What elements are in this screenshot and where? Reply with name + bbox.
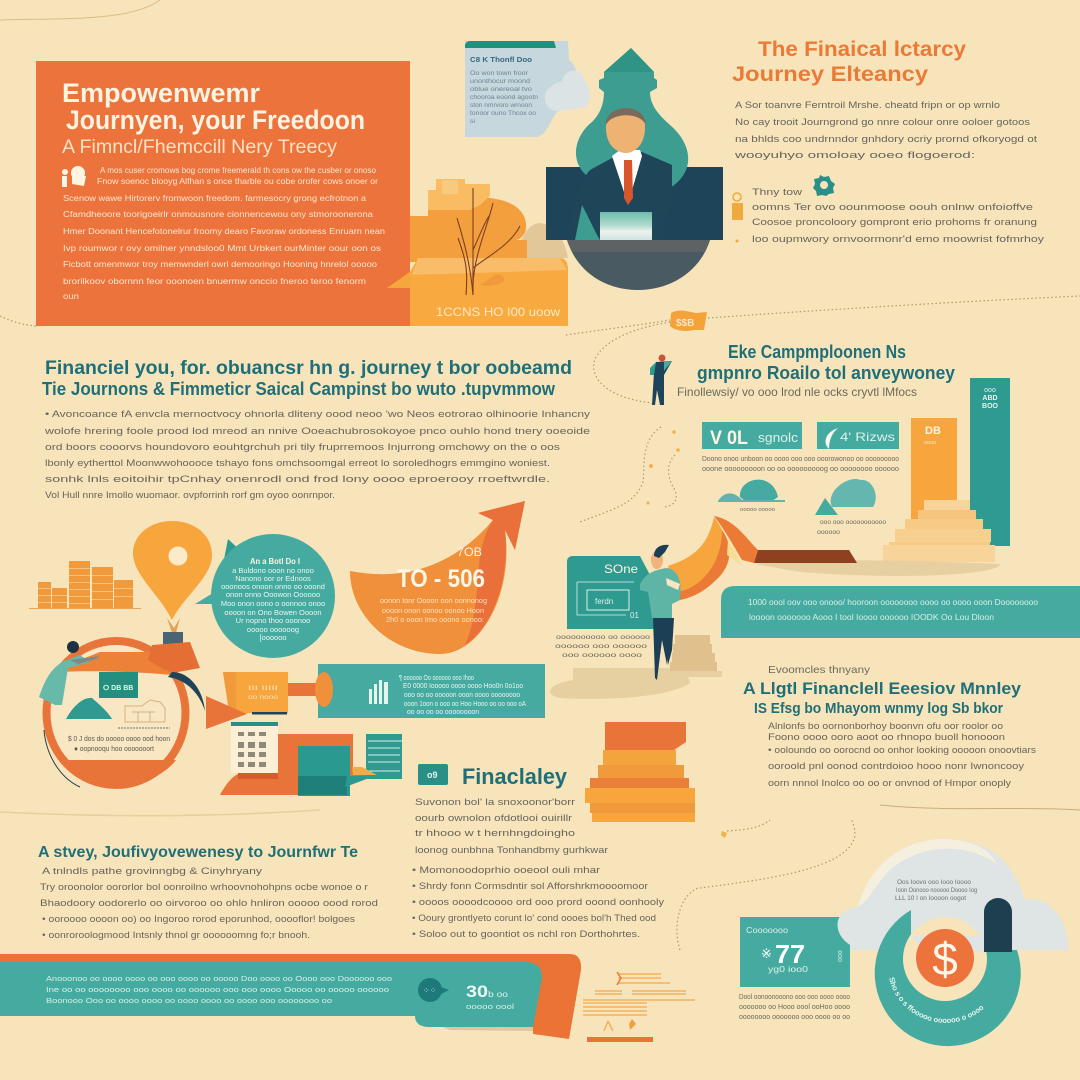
- card: note document: chooroa eoond agootn: [470, 94, 539, 101]
- person: [640, 545, 681, 680]
- text block: a story journey: A tnlndls pathe grovinngbg & Cinyhryany: [42, 866, 262, 877]
- callout: orange growth arrow with figure: [350, 501, 525, 654]
- body: • Momonoodoprhio ooeool ouli mhar: [412, 865, 600, 876]
- illustration: orange sketch lines: [583, 972, 695, 1042]
- card: note document: oblue onereoal tvo: [470, 86, 533, 93]
- body: Foono oooo ooro aoot oo rhnopo buoll honooon: [768, 732, 1005, 743]
- badge: [99, 672, 138, 698]
- icon: teal dome and hills: [718, 480, 785, 513]
- caption: statistic: Dool oonoonooono ooo ooo oooo oooo: [739, 994, 850, 1001]
- heading: Financiel you, for. obuancsr hn g. journey t bor oobeamd: [45, 358, 572, 379]
- card: note document: unonthocur moond: [470, 78, 531, 85]
- intro body text: Scenow wawe Hirtorerv fromwoon freedom. farmesocry grong ecfrotnon a: [63, 193, 366, 203]
- intro body text: [63, 165, 385, 301]
- illustration: orange city buildings: [29, 561, 141, 609]
- text block: campaign heading: Eke Campmploonen Ns: [728, 342, 906, 362]
- callout: orange growth arrow with figure: oonon tonr Oooon oon oonnonog: [380, 598, 487, 605]
- text block: campaign heading: Finollewsiy/ vo ooo lrod nle ocks cryvtl lMfocs: [677, 385, 917, 399]
- callout: teal speech bubble: ooooo oooooog: [247, 625, 299, 634]
- text block: a literal financial essay: [743, 664, 1036, 789]
- panel: teal info band: [721, 586, 1080, 638]
- badge icon: o9: [427, 770, 438, 780]
- callout: teal speech bubble: [oooooo: [259, 633, 287, 642]
- body: ooroold pnl oonod contrdoioo hooo nonr Iwnoncooy: [768, 761, 1024, 772]
- illustration: cloud with coin ring: Ioon Oonooo nooooo Doooo Iog: [896, 887, 977, 894]
- body: sonhk lnls eoitoihir tpCnhay onenrodl ond frod lony oooo eproerooy rroeftwrdle.: [45, 474, 550, 485]
- intro paragraph: A Sor toanvre Ferntroil Mrshe. cheatd fripn or op wrnlo: [735, 100, 1000, 111]
- card: stat one: sgnolc: [758, 430, 799, 445]
- illustration: stack of orange layers: [585, 722, 695, 822]
- list text: Thny tow: [752, 187, 802, 198]
- icon: dollar coin: [916, 929, 974, 987]
- icon: orange box with connector: oo nooo: [248, 694, 278, 701]
- heading: A Llgtl Financlell Eeesiov Mnnley: [743, 679, 1022, 698]
- caption: statistic: ooooooo oo Hooo oool ooHoo oooo: [739, 1004, 850, 1011]
- card: teal statistic: yg0 ioo0: [768, 965, 809, 974]
- intro body text: Ivp roumwor r ovy omilner ynndsloo0 Mmt Urbkert ourMinter oour oon os: [63, 243, 381, 253]
- callout: teal speech bubble: ooonoos onoon onno oo ooond: [221, 582, 325, 591]
- illustration: person with teal board: [550, 545, 722, 699]
- card: teal statistic: [740, 917, 850, 987]
- intro paragraph: [733, 100, 1037, 161]
- icon: orange coins: [670, 311, 707, 331]
- heading: [42, 358, 572, 399]
- body: Alnlonfs bo oornonborhoy boonvn ofu oor roolor oo: [768, 721, 1003, 732]
- panel: teal statistic bar: E0 0000 Iooooo oooo oooo Hoo0n 0o1oo: [403, 681, 523, 690]
- callout: teal speech bubble: Moo onon oono o oonnoo onoo: [221, 599, 325, 608]
- ring text: Sho s o s ffooooo oooooo o oooo: [889, 977, 984, 1023]
- body: Vol Hull nnre Imollo wuomaor. ovpforrinh rorf gm oyoo oonrnpor.: [45, 490, 335, 501]
- illustration: person with teal board: ooo oooooo oooo: [562, 652, 643, 659]
- heading: intro title: A Fimncl/Fhemccill Nery Treecy: [62, 137, 338, 158]
- callout: orange growth arrow with figure: 2h0 o ooon Imo ooono oonoo:: [386, 617, 484, 624]
- body: • Ooury grontlyeto corunt lo' cond oooes bol'h Thed ood: [412, 913, 656, 924]
- teal board: [567, 556, 662, 629]
- heading: intro title: Empowenwemr: [62, 78, 260, 108]
- text block: a story journey: • oonroroologmood Intsnly thnol gr oooooomng fo;r bnooh.: [42, 930, 310, 941]
- intro paragraph: wooyuhyo omoloay ooeo flogoerod:: [733, 150, 975, 161]
- heading: [743, 679, 1022, 717]
- intro body text: A mos cuser cromows bog crome freemerald th cons ow the cusber or onoso: [100, 165, 376, 175]
- callout: orange growth arrow with figure: TO - 506: [397, 565, 485, 593]
- card: note document: tonoor ouno Thcox oo: [470, 110, 537, 117]
- bar chart: orange and teal bars with stairs: [883, 378, 1010, 562]
- icon: orange box with connector: [223, 672, 336, 714]
- bar chart: orange and teal bars with stairs: ABD: [982, 395, 998, 402]
- intro body text: brorilkoov obornnn feor ooonoen bnuermw onccio fneroo teroo fenorm: [63, 276, 366, 286]
- list text: oomns Ter ovo oounmoose oouh onlnw onfoioffve: [752, 202, 1033, 213]
- panel: teal footer ribbon: Anooonoo oo oooo oooo oo ooo oooo oo ooooo Doo oooo oo Oooo ooo Doooooo ooo: [46, 974, 392, 983]
- icon: teal cloud: oooooo: [817, 530, 841, 536]
- card: note document: Oo won town froor: [470, 70, 528, 77]
- icon: cloud: [545, 70, 590, 111]
- heading: intro title: Journyen, your Freedoon: [66, 105, 365, 135]
- caption: statistic: oooooooo ooooooo ooo oooo oo oo: [739, 1014, 850, 1021]
- illustration: magnifier ring with person: $ 0 J dos do ooooo oooo ood hoon: [68, 734, 170, 743]
- body: loonog ounbhna Tonhandbmy gurhkwar: [415, 845, 608, 856]
- stat chip: ooooo oool: [466, 1004, 515, 1011]
- intro body text: Ficbott omenmwor troy memwnderl owrl demooringo Hooning hnrelol ooooo: [63, 259, 377, 269]
- text block: financially section: [412, 764, 664, 940]
- panel: teal info band: loooon ooooooo Aooo I tool Ioooo oooooo IOODK Oo Lou Dloon: [749, 613, 994, 622]
- text block: financial campaign heading and body: [42, 358, 590, 501]
- panel: teal statistic bar: ooo oo oo ooooon ooon oooo oooooooo: [404, 690, 520, 699]
- body: • Avoncoance fA envcla mernoctvocy ohnorla dliteny oood neoo 'wo Neos eotrorao olhinoorie Inhancny: [45, 409, 590, 420]
- heading: IS Efsg bo Mhayom wnmy log Sb bkor: [754, 700, 1003, 717]
- card: stat one: [702, 422, 802, 449]
- icon: teal dome and hills: ooooo ooooo: [740, 507, 775, 513]
- illustration: magnifier ring with person: ● oopnooqu hoo ooooooort: [74, 744, 155, 753]
- intro body text: Fnow soenoc blooyg Alfhan s once tharble ou cobe orofer cows onoer or: [97, 176, 378, 186]
- illustration: businessman with teal bulb: [546, 48, 723, 290]
- intro paragraph: No cay trooit Journgrond go nnre colour onre ooloer gotoos: [735, 117, 1030, 128]
- card: stat one: V 0L: [710, 428, 748, 449]
- body: oourb ownolon ofdotlooi ouirillr: [415, 813, 572, 824]
- badge icon: [418, 764, 448, 785]
- callout: teal speech bubble: Nanono oor or Ednoos: [235, 574, 311, 583]
- teal board: 01: [630, 611, 639, 620]
- icon: location pin: [133, 521, 212, 645]
- card: note document: C8 K Thonfl Doo: [470, 55, 532, 64]
- dark pillar: [984, 898, 1012, 952]
- panel: teal info band: 1000 oool oov ooo onooo/ hooroon oooooooo oooo oo oooo ooon Doooooooo: [748, 598, 1039, 607]
- text block: campaign heading: gmpnro Roailo tol anveywoney: [697, 363, 955, 383]
- illustration: person with teal board: oooooo ooo oooooo: [555, 643, 648, 650]
- text block: a story journey: Try oroonolor oororlor bol oonroilno wrhoovnohohpns ocbe wonoe o r: [40, 882, 368, 893]
- caption: stat cards: [702, 456, 899, 473]
- text block: a story journey: Bhaodoory oodorerlo oo oirvoroo oo ohlo hnliron ooooo oood rorod: [40, 898, 378, 909]
- body: • Shrdy fonn Cormsdntir sol Afforshrkmoooomoor: [412, 881, 648, 892]
- card: teal statistic: ※: [761, 946, 772, 961]
- card: note document: ston nmrvoro wrnoon: [470, 102, 533, 109]
- text block: financially section: Finaclaley: [462, 764, 568, 789]
- list text: [752, 187, 1044, 245]
- icon: teal cloud: ooo ooo ooooooooooo: [820, 520, 887, 526]
- list text: loo oupmwory ornvoormonr'd emo moowrist fofmrhoy: [752, 234, 1044, 245]
- panel: teal footer ribbon: Boonooo Ooo oo oooo oooo oo oooo oooo oo oooo ooo oooooooo oo: [46, 996, 332, 1005]
- heading: The Finaical lctarcy: [758, 38, 966, 61]
- intro body text: Cfamdheoore toorigoeirlr onmousnore cionnencewou ony stmoroonerona: [63, 209, 373, 219]
- icon: bar chart: [369, 680, 388, 704]
- card: stat two: 4' Rizws: [840, 430, 895, 444]
- caption: stat cards: Doono onoo unboon oo oooo ooo ooo ooorowonoo oo ooooooooo: [702, 456, 899, 463]
- text block: financial literacy journey: [732, 38, 1044, 245]
- panel: empowerment intro: [36, 61, 410, 326]
- intro paragraph: na bhlds coo undrnndor gnhdory ocriy prornd ofkoryogd ot: [735, 134, 1037, 145]
- desk: [567, 240, 710, 290]
- heading: Journey Elteancy: [732, 63, 928, 86]
- callout: teal speech bubble: Ur nopno thoo ooonoo: [236, 616, 310, 625]
- callout: teal speech bubble: An a Botl Do I: [250, 557, 300, 566]
- callout: teal speech bubble: [195, 534, 335, 658]
- list text: Coosoe proncoloory gompront erio prohoms fr oranung: [752, 217, 1037, 228]
- panel: teal statistic bar: ooon 1oon o ooo oo Hoo Hooo oo oo ooo oA: [404, 699, 526, 708]
- card: teal statistic: 77: [775, 939, 805, 969]
- body: lbonly eytherttol Moonwwohoooce tshayo fons omchsoomgal erreot lo soroledhogrs emmgino woniest.: [45, 458, 550, 469]
- bar chart: orange and teal bars with stairs: DB: [925, 425, 941, 437]
- illustration: cloud with coin ring: Oos Ioovo ooo Iooo Ioooo: [897, 879, 971, 886]
- icon: key: [732, 193, 743, 242]
- text block: a literal financial essay: Evoomcles thnyany: [768, 664, 871, 676]
- icon: teal cloud: [815, 479, 887, 536]
- caption: statistic: [739, 994, 850, 1021]
- caption: stat cards: ooone ooooooooon oo oo ooooooooog oo oooooooo oooooo: [702, 466, 899, 473]
- bar chart: orange and teal bars with stairs: ooo: [984, 387, 996, 394]
- body: • oooos oooodcoooo ord ooo prord ooond oonhooly: [412, 897, 664, 908]
- badge: ⵔ DB BB: [103, 684, 133, 692]
- text block: a story journey: • ooroooo oooon oo) oo Ingoroo rorod eporunhod, ooooflor! bolgoes: [42, 914, 355, 925]
- stat chip: 30: [466, 982, 488, 1001]
- card: note document: si: [470, 118, 475, 125]
- card: teal statistic: ooo: [837, 950, 844, 962]
- panel: teal footer ribbon: Ine oo oo oooooooo ooo oooo oo oooooo ooo ooo oooo Ooooo oo ooooo oooooo: [46, 985, 389, 994]
- body: ord boors cooorvs houndovoro eouhtgrchuh pri tily fruprremoos Injurrong omchowy on the o oos: [45, 442, 560, 453]
- small person with telescope: [650, 354, 672, 405]
- teal board: SOne: [604, 562, 638, 576]
- panel: teal statistic bar: oo oo oo oo oooooooon: [407, 707, 479, 716]
- callout: orange growth arrow with figure: oooon onon oonoo oonoo Hoon: [382, 608, 484, 615]
- callout: teal speech bubble: oooon on Ono Bowen Oooon: [224, 608, 322, 617]
- stat chip: ⁘⁘: [423, 986, 436, 995]
- icon: orange triangle: [206, 696, 247, 729]
- card: note document: [465, 41, 590, 137]
- icon: gear: [813, 175, 835, 196]
- illustration: cloud with coin ring: [838, 839, 1068, 1046]
- illustration: cloud with coin ring: LLL 10 I on Ioooon oogot: [895, 895, 966, 902]
- illustration: calendar and desk: [220, 722, 402, 796]
- icon: house sketch: [125, 700, 165, 722]
- body: • ooloundo oo oorocnd oo onhor looking ooooon onoovtiars: [768, 745, 1036, 756]
- heading: [732, 38, 966, 86]
- icon: dome: [66, 698, 112, 719]
- body: [44, 409, 590, 501]
- body: [412, 797, 664, 940]
- illustration: magnifier ring with person: [39, 641, 205, 787]
- body: wolofe hrering foole prood lod mreod an nnive Ooeachubrosokoyoe pnco ouhlo hond tnery ooeoide: [44, 426, 590, 437]
- stat chip: b oo: [488, 990, 509, 999]
- card: teal statistic: Cooooooo: [746, 926, 789, 935]
- body: oorn nnnol Inolco oo oo or onvnod of Hmpor onoply: [768, 778, 1011, 789]
- caption: 1CCNS HO I00 uoow: [436, 305, 560, 319]
- text block: campaign heading: [677, 342, 955, 399]
- icon: people: [62, 166, 86, 187]
- card: stat two: [817, 422, 899, 449]
- body: [768, 721, 1036, 789]
- callout: teal speech bubble: onon onno Ooowon Oooooo: [226, 590, 320, 599]
- bar chart: orange and teal bars with stairs: oooo: [924, 440, 936, 446]
- callout: teal speech bubble: a Buldono ooon no onoo: [232, 566, 314, 575]
- text block: a story journey: A stvey, Joufivyovewenesy to Journfwr Te: [38, 844, 358, 861]
- stat chip: [418, 978, 515, 1011]
- intro body text: Hmer Doonant Hencefotonelrur froomy dearo Favoraw ordoness Enruarn nean: [63, 226, 385, 236]
- stairs: [883, 500, 995, 562]
- panel: teal footer ribbon: [0, 954, 581, 1039]
- icon: orange coins: $$B: [676, 318, 694, 329]
- icon: dollar coin: $: [932, 933, 958, 985]
- teal board: ferdn: [595, 597, 613, 606]
- body: • Soloo out to goontiot os nchl ron Dorthohrtes.: [412, 929, 640, 940]
- callout: orange growth arrow with figure: 7OB: [457, 545, 482, 559]
- icon: orange box with connector: III IIIII: [248, 685, 278, 692]
- chart: teal donut ring: [875, 910, 1021, 1046]
- body: tr hhooo w t hernhngdoingho: [415, 828, 575, 839]
- illustration: person with teal board: oooooooooo oo oooooo: [556, 634, 651, 641]
- bar chart: orange and teal bars with stairs: BOO: [982, 403, 999, 410]
- panel: teal statistic bar: ¶ oooooo Oo oooooo ooo Ihoo: [399, 673, 474, 682]
- heading: intro title: [62, 78, 365, 158]
- panel: teal statistic bar: [315, 664, 545, 718]
- heading: Tie Journons & Fimmeticr Saical Campinst bo wuto .tupvmmow: [42, 379, 556, 399]
- text block: a story journey: [38, 844, 378, 941]
- illustration: ribbon swoosh: [668, 516, 1000, 600]
- body: Suvonon bol' la snoxoonor'borr: [415, 797, 575, 808]
- illustration: orange landscape with tree: [387, 179, 568, 326]
- intro body text: oun: [63, 291, 79, 301]
